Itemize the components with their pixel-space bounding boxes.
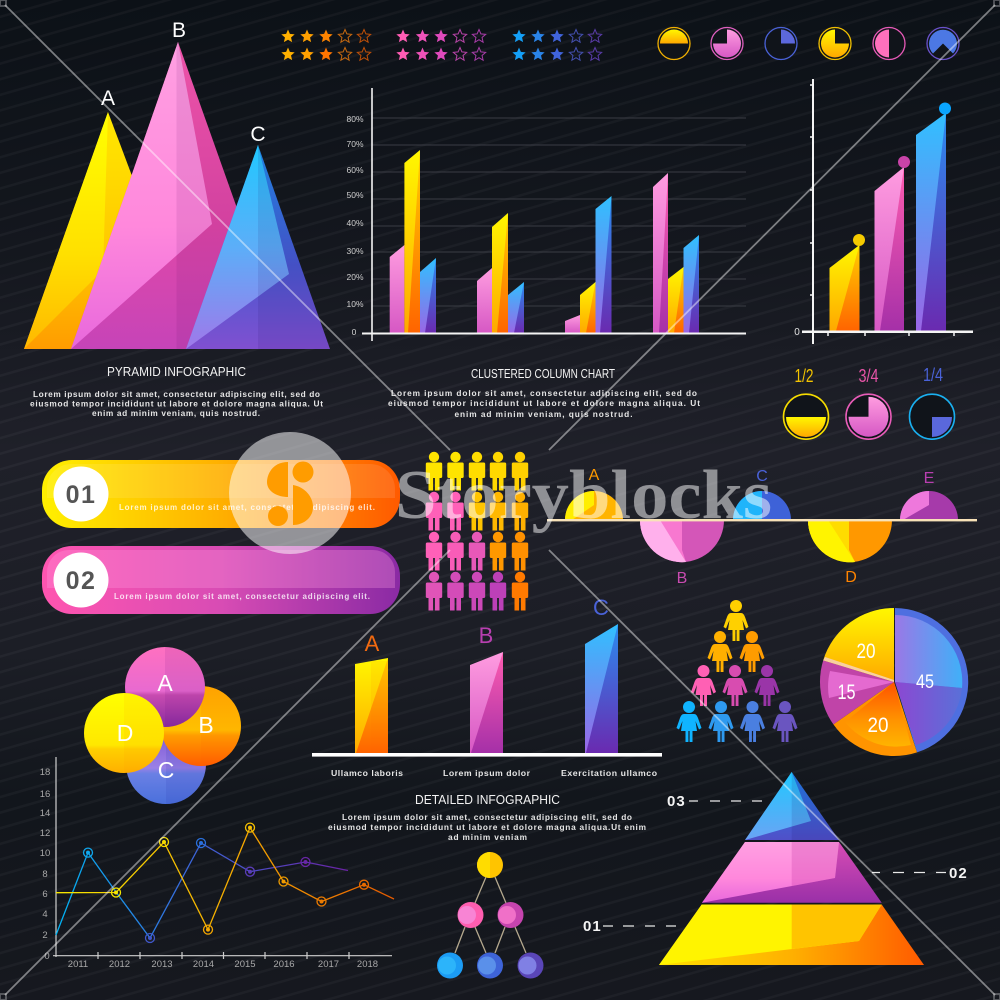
axis labels: 10% <box>346 299 364 309</box>
icon: half pink <box>873 28 905 60</box>
label 01 <box>583 918 676 935</box>
yellow series <box>56 823 394 934</box>
circle D: D <box>117 720 133 746</box>
year labels: 2013 <box>151 959 173 970</box>
year labels: 2012 <box>109 959 130 970</box>
pyramid C <box>186 123 330 349</box>
y labels: 4 <box>42 909 48 920</box>
text block: detailed description: ad minim veniam <box>448 832 527 842</box>
text block: pyramid description <box>30 389 323 418</box>
icon: blue pie <box>927 28 959 60</box>
half circle D: D <box>845 569 857 586</box>
half circle D <box>808 520 892 586</box>
half circle C: C <box>756 468 768 485</box>
cluster 4 <box>653 173 699 333</box>
y labels: 8 <box>42 869 48 880</box>
y labels: 16 <box>40 789 50 800</box>
slice 15: 15 <box>838 681 856 704</box>
stacked pyramid <box>583 772 968 965</box>
half circle B <box>640 520 724 587</box>
tree diagram <box>437 852 544 978</box>
slice 20 yellow: 20 <box>856 640 876 663</box>
banner 02: Lorem ipsum dolor sit amet, consectetur adipiscing elit. <box>114 592 370 601</box>
people grid <box>426 452 528 610</box>
text block: column chart description: Lorem ipsum dolor sit amet, consectetur adipiscing elit, sed do <box>391 388 697 398</box>
pyramid B: B <box>172 19 186 42</box>
bar captions: Exercitation ullamco <box>561 768 657 778</box>
slice 45 <box>895 608 968 752</box>
circle A: A <box>157 670 173 696</box>
y labels: 6 <box>42 889 48 900</box>
icon: half yellow <box>658 28 690 60</box>
text block: detailed description: eiusmod tempor incididunt ut labore et dolore magna aliqua.Ut enim <box>328 822 646 832</box>
pyramid C: C <box>250 123 266 146</box>
label 02: 02 <box>949 865 968 882</box>
text block: pyramid description: eiusmod tempor incididunt ut labore et dolore magna aliqua. Ut <box>30 398 323 408</box>
year labels: 2016 <box>273 959 295 970</box>
axis labels: 30% <box>346 246 364 256</box>
blue series <box>56 838 348 942</box>
tier middle <box>702 842 882 903</box>
axes <box>362 88 746 341</box>
bottom nodes <box>437 952 544 978</box>
text block: column chart description: enim ad minim veniam, quis nostrud. <box>454 409 632 419</box>
label 01: 01 <box>583 918 602 935</box>
bar captions: Ullamco laboris <box>331 768 403 778</box>
y labels <box>40 767 50 962</box>
middle nodes <box>458 902 524 928</box>
line chart <box>40 757 394 970</box>
icon: three quarter pink <box>711 28 743 60</box>
circle D <box>84 693 164 773</box>
year labels: 2014 <box>193 959 214 970</box>
half circle E <box>900 470 958 520</box>
fraction circles <box>784 365 954 439</box>
bar B: B <box>479 623 493 648</box>
half circle A: A <box>589 467 600 484</box>
baseline <box>547 519 977 521</box>
label 02 <box>872 865 968 882</box>
tier top <box>745 772 839 840</box>
circle A <box>125 647 205 727</box>
icon: three quarter yellow <box>819 28 851 60</box>
axis labels <box>346 114 364 337</box>
year labels: 2011 <box>68 959 88 970</box>
half circle C <box>733 468 791 520</box>
tier bottom <box>659 904 924 965</box>
bar yellow <box>830 234 865 331</box>
slice 15 <box>820 660 894 724</box>
pyramid infographic chart <box>24 19 330 349</box>
text block: column chart description <box>388 388 700 419</box>
overlapping circles <box>84 647 241 804</box>
axis labels: 80% <box>346 114 364 124</box>
watermark text: Storyblocks <box>395 457 772 534</box>
clustered column chart <box>346 88 746 341</box>
circle B <box>161 686 241 766</box>
bar C <box>585 595 618 753</box>
circle B: B <box>198 712 214 738</box>
fraction 1/2: 1/2 <box>794 366 814 386</box>
slice 20 orange <box>833 682 917 756</box>
right growth bar chart <box>794 79 973 344</box>
icon: quarter blue <box>765 28 797 60</box>
y labels: 18 <box>40 767 50 778</box>
blue stars <box>512 30 602 60</box>
bar blue <box>916 102 951 331</box>
label 03 <box>667 793 762 810</box>
text block: detailed description <box>328 812 646 842</box>
fraction 3/4 <box>846 366 891 439</box>
heading: clustered column chart: CLUSTERED COLUMN CHART <box>471 366 615 381</box>
fraction 1/4: 1/4 <box>923 365 943 385</box>
heading: pyramid infographic: PYRAMID INFOGRAPHIC <box>107 364 246 379</box>
year labels: 2015 <box>234 959 256 970</box>
heading: detailed infographic: DETAILED INFOGRAPHIC <box>415 792 560 807</box>
axis labels: 40% <box>346 218 364 228</box>
text block: detailed description: Lorem ipsum dolor sit amet, consectetur adipiscing elit, sed do <box>342 812 632 822</box>
text block: pyramid description: Lorem ipsum dolor sit amet, consectetur adipiscing elit, sed do <box>33 389 320 399</box>
axis labels: 70% <box>346 139 364 149</box>
people pyramid <box>676 600 798 742</box>
circle C: C <box>158 757 174 783</box>
year labels: 2017 <box>318 959 339 970</box>
pie chart <box>820 608 968 756</box>
half circle scale <box>547 467 977 587</box>
bar captions <box>331 768 657 778</box>
fraction 3/4: 3/4 <box>858 366 878 386</box>
half circle E: E <box>924 470 934 487</box>
y labels: 2 <box>42 930 48 941</box>
star ratings <box>281 30 602 60</box>
banner 02 <box>42 546 400 614</box>
slice 20 yellow <box>823 608 894 682</box>
slice 45: 45 <box>916 672 934 693</box>
banner 02: 02 <box>66 567 96 595</box>
year labels <box>68 959 378 970</box>
zero label: 0 <box>794 327 800 338</box>
pyramid A <box>24 87 197 349</box>
pyramid A: A <box>101 87 115 110</box>
cluster 2 <box>477 213 524 333</box>
half circle B: B <box>677 570 687 587</box>
baseline <box>312 753 662 757</box>
y labels: 0 <box>44 951 50 962</box>
pyramid B <box>71 19 287 349</box>
axis labels: 60% <box>346 165 364 175</box>
pink stars <box>396 30 486 60</box>
axes <box>802 79 973 344</box>
half circle A <box>565 467 623 520</box>
axis labels: 20% <box>346 272 364 282</box>
bar A: A <box>365 631 380 656</box>
axis labels: 50% <box>346 190 364 200</box>
banner 01 <box>42 460 400 528</box>
text block: column chart description: eiusmod tempor incididunt ut labore et dolore magna aliqua. Ut <box>388 398 700 408</box>
cluster 1 <box>390 150 436 333</box>
top node <box>477 852 503 878</box>
bar B <box>470 623 503 753</box>
orange stars <box>281 30 371 60</box>
y labels: 10 <box>40 848 50 859</box>
banner 01: 01 <box>66 481 96 509</box>
axes <box>53 757 392 959</box>
fraction 1/4 <box>910 365 954 439</box>
axis labels: 0 <box>352 327 357 337</box>
grid lines <box>372 118 746 306</box>
cluster 3 <box>565 196 612 333</box>
slice 20 orange: 20 <box>868 714 888 737</box>
banner 01: Lorem ipsum dolor sit amet, consectetur adipiscing elit. <box>119 503 375 512</box>
center bar chart <box>312 595 662 778</box>
text block: pyramid description: enim ad minim veniam, quis nostrud. <box>92 408 260 418</box>
watermark logo <box>229 432 351 554</box>
bar pink <box>874 156 910 331</box>
bar captions: Lorem ipsum dolor <box>443 768 531 778</box>
bar C: C <box>593 595 609 620</box>
y labels: 12 <box>40 828 50 839</box>
circle C <box>126 724 206 804</box>
year labels: 2018 <box>357 959 378 970</box>
bar A <box>355 631 388 753</box>
fraction 1/2 <box>784 366 828 439</box>
y labels: 14 <box>40 808 50 819</box>
label 03: 03 <box>667 793 686 810</box>
top fraction circle icons <box>658 28 959 60</box>
